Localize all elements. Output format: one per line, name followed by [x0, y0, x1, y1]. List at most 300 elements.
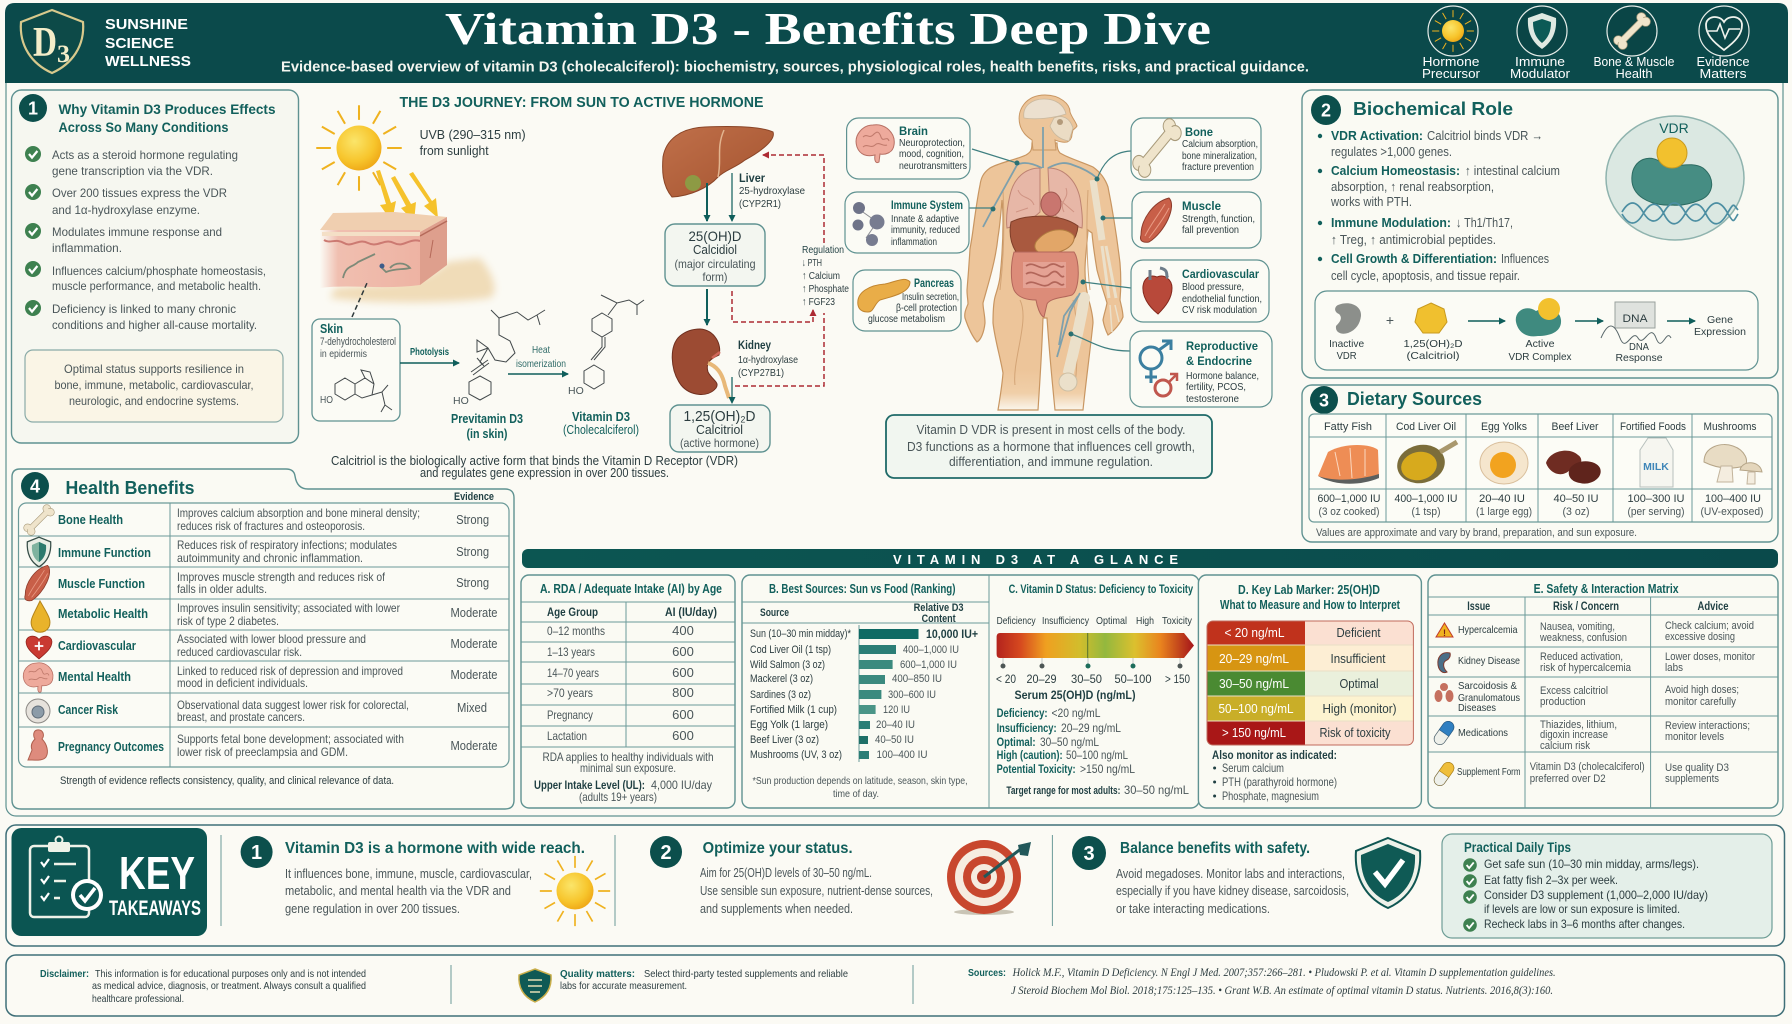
- RDA table: >70 years: [547, 686, 593, 700]
- practical daily tips: Get safe sun (10–30 min midday, arms/legs).: [1484, 857, 1699, 871]
- vitamin D3 molecule: (Cholecalciferol): [563, 422, 639, 437]
- RDA table: [521, 602, 735, 747]
- calcidiol box: Calcidiol: [693, 242, 737, 257]
- status range labels: [997, 615, 1193, 627]
- source bar chart: 120 IU: [883, 704, 910, 716]
- callout: VDR is present in most cells: Vitamin D VDR is present in most cells of the body.: [916, 422, 1186, 437]
- human body anatomy figure: [965, 95, 1123, 410]
- status definitions: High (caution):: [997, 748, 1063, 762]
- panel E: safety and interaction matrix: [1428, 575, 1778, 808]
- evidence ratings: [450, 512, 498, 753]
- callout: pancreas: β-cell protection: [896, 302, 957, 314]
- status range labels: Toxicity: [1162, 615, 1193, 627]
- column headers: Risk / Concern: [1553, 599, 1619, 613]
- benefit descriptions: risk of type 2 diabetes.: [177, 614, 279, 628]
- panel 4: health benefits: [12, 469, 514, 809]
- organ leader lines: [969, 149, 1132, 351]
- dietary note: Values are approximate and vary by brand, preparation, and sun exposure.: [1316, 527, 1637, 539]
- RDA table: AI (IU/day): [665, 605, 717, 619]
- column headers: Issue: [1467, 599, 1490, 613]
- callout: muscle: fall prevention: [1182, 224, 1239, 236]
- panel D title: What to Measure and How to Interpret: [1220, 598, 1401, 612]
- arrow: calcidiol to kidney: [706, 289, 708, 325]
- panel C: vitamin D status: [996, 582, 1194, 797]
- status range labels: High: [1136, 615, 1154, 627]
- panel B title: B. Best Sources: Sun vs Food (Ranking): [769, 582, 956, 596]
- heading: Biochemical Role: [1353, 99, 1513, 119]
- regulation feedback arrows: [732, 155, 824, 386]
- role bullet list: [1318, 128, 1560, 283]
- callout: bone: Bone: [1185, 125, 1213, 139]
- food source table: (3 oz): [1562, 506, 1590, 518]
- arrow: heat isomerization: [508, 344, 568, 374]
- icon: immune modulator: [1517, 6, 1567, 56]
- lab interpretation table: > 150 ng/mL: [1222, 725, 1286, 740]
- risk column: production: [1540, 696, 1586, 708]
- heading: Across So Many Conditions: [58, 119, 229, 135]
- heading: [58, 101, 276, 135]
- UVB label: from sunlight: [420, 143, 489, 158]
- skin box with 7-dehydrocholesterol: [312, 319, 400, 421]
- D3 journey title: THE D3 JOURNEY: FROM SUN TO ACTIVE HORMONE: [400, 95, 764, 111]
- icon: target: [947, 840, 1031, 915]
- status definitions: 20–29 ng/mL: [1061, 721, 1121, 735]
- source bar chart: 600–1,000 IU: [900, 659, 957, 671]
- callout: cardiovascular: endothelial function,: [1182, 293, 1262, 305]
- arrow: photolysis: Photolysis: [410, 346, 449, 358]
- RDA notes: (adults 19+ years): [579, 790, 657, 804]
- takeaway 3: Balance benefits with safety.: [1120, 840, 1310, 857]
- callout: immune system: inflammation: [891, 236, 937, 248]
- benefit check list: and 1α-hydroxylase enzyme.: [52, 203, 200, 217]
- benefit names: Muscle Function: [58, 576, 145, 591]
- status gradient arrow: [997, 633, 1194, 668]
- RDA table: 600: [672, 707, 694, 722]
- food source table: Beef Liver: [1552, 421, 1599, 433]
- previtamin D3 molecule: [451, 310, 545, 441]
- advice column: excessive dosing: [1665, 631, 1735, 643]
- RDA table: 0–12 months: [547, 624, 605, 638]
- food source table: 40–50 IU: [1554, 493, 1599, 505]
- issue names: [1457, 624, 1521, 778]
- takeaway 3: [1072, 836, 1420, 916]
- heart: [1041, 192, 1061, 216]
- icon: liver: [663, 127, 773, 197]
- icon: fortified milk: MILK: [1643, 461, 1669, 473]
- source bar chart: Sardines (3 oz): [750, 689, 811, 701]
- takeaway 3: especially if you have kidney disease, sarcoidosis,: [1116, 884, 1349, 898]
- takeaway 3: Avoid megadoses. Monitor labs and interactions,: [1116, 867, 1345, 881]
- title: Vitamin D3 - Benefits Deep Dive: [445, 3, 1211, 54]
- serum axis label: Serum 25(OH)D (ng/mL): [1014, 688, 1136, 702]
- callout: bone: bone mineralization,: [1182, 150, 1257, 162]
- skin box with 7-dehydrocholesterol: in epidermis: [320, 348, 367, 360]
- role bullet list: Cell Growth & Differentiation:: [1331, 251, 1497, 266]
- takeaway 2: Optimize your status.: [703, 840, 853, 857]
- heading: Why Vitamin D3 Produces Effects: [58, 101, 276, 117]
- benefit check list: [25, 146, 266, 332]
- RDA notes: minimal sun exposure.: [580, 761, 676, 775]
- kidney pathway: [732, 338, 798, 403]
- icon captions: Matters: [1700, 67, 1746, 81]
- advice column: monitor levels: [1665, 731, 1724, 743]
- icon: quality shield: [519, 969, 551, 1002]
- callout: muscle: Strength, function,: [1182, 213, 1255, 225]
- benefit names: Cancer Risk: [58, 702, 119, 717]
- intestines: [1011, 252, 1078, 317]
- callout: cardiovascular: CV risk modulation: [1182, 304, 1257, 316]
- callout: reproductive and endocrine: Reproductive: [1186, 339, 1258, 353]
- advice column: Lower doses, monitor: [1665, 651, 1755, 663]
- RDA table: 600: [672, 665, 694, 680]
- icon: hormone precursor: [1428, 6, 1478, 56]
- icon: fortified milk: [1640, 438, 1673, 487]
- sun production note: time of day.: [833, 788, 879, 800]
- status definitions: Deficiency:: [997, 706, 1048, 720]
- status range labels: Optimal: [1096, 615, 1127, 627]
- source bar chart: 20–40 IU: [876, 719, 915, 731]
- benefit check list: gene transcription via the VDR.: [52, 164, 213, 178]
- risk column: digoxin increase: [1540, 729, 1608, 741]
- VDR activation pathway: DNA: [1629, 341, 1649, 353]
- benefit check list: Modulates immune response and: [52, 225, 222, 239]
- icon: DNA response: [1615, 302, 1655, 328]
- RDA table: 1–13 years: [547, 645, 595, 659]
- takeaway 1: metabolic, and mental health via the VDR and: [285, 884, 511, 898]
- evidence ratings: Strong: [456, 512, 489, 527]
- vitamin D3 molecule: [563, 295, 644, 437]
- icon: skin cross-section: [320, 212, 495, 317]
- calcitriol box: (active hormone): [680, 436, 759, 450]
- lab interpretation table: Insufficient: [1330, 651, 1386, 666]
- journey caption: and regulates gene expression in over 200 tissues.: [420, 466, 669, 480]
- benefit names: Immune Function: [58, 545, 151, 560]
- status range labels: Insufficiency: [1042, 615, 1090, 627]
- sun production note: *Sun production depends on latitude, season, skin type,: [752, 775, 968, 787]
- vitamin D3 molecule: Vitamin D3: [572, 409, 630, 424]
- practical daily tips: Consider D3 supplement (1,000–2,000 IU/day): [1484, 888, 1708, 902]
- previtamin D3 molecule: HO: [453, 395, 469, 407]
- source bar chart: Beef Liver (3 oz): [750, 734, 819, 746]
- role bullet list: absorption, ↑ renal reabsorption,: [1331, 179, 1494, 194]
- icon: mushrooms: [1704, 445, 1762, 484]
- takeaway 2: Aim for 25(OH)D levels of 30–50 ng/mL.: [700, 866, 872, 880]
- callout: pancreas: Pancreas: [914, 276, 954, 290]
- evidence column label: Evidence: [454, 491, 494, 503]
- calcidiol box: 25(OH)D: [688, 228, 742, 244]
- heading: Dietary Sources: [1347, 389, 1482, 409]
- benefit check list: Over 200 tissues express the VDR: [52, 186, 227, 200]
- optimal status callout: neurologic, and endocrine systems.: [69, 394, 239, 408]
- role bullet list: Calcium Homeostasis:: [1331, 163, 1460, 178]
- callout: reproductive and endocrine: [1130, 331, 1272, 407]
- disclaimer: Disclaimer:: [40, 968, 89, 980]
- icon captions: Immune: [1515, 55, 1565, 69]
- role bullet list: ↑ Treg, ↑ antimicrobial peptides.: [1331, 232, 1496, 247]
- right leg bone: [1059, 292, 1090, 391]
- callout: VDR is present in most cells: differentiation, and immune regulation.: [949, 454, 1153, 469]
- RDA table: 600: [672, 644, 694, 659]
- lungs: [1007, 168, 1082, 228]
- regulation list: [802, 244, 849, 308]
- benefit descriptions: Improves muscle strength and reduces risk of: [177, 570, 386, 584]
- icon: beef liver: [1546, 451, 1601, 484]
- practical daily tips: [1442, 834, 1772, 938]
- RDA table: 600: [672, 728, 694, 743]
- benefit names: Pregnancy Outcomes: [58, 739, 164, 754]
- RDA notes: Upper Intake Level (UL):: [534, 778, 645, 792]
- risk column: Reduced activation,: [1540, 651, 1623, 663]
- icon captions: Health: [1616, 67, 1653, 81]
- status definitions: [997, 706, 1189, 797]
- VDR receptor illustration: [1606, 116, 1744, 240]
- food source table: 400–1,000 IU: [1394, 493, 1458, 505]
- VDR activation pathway: +: [1386, 312, 1394, 328]
- takeaway 3: 3: [1083, 843, 1095, 865]
- icon captions: Precursor: [1422, 67, 1480, 81]
- RDA table: Age Group: [547, 605, 598, 619]
- RDA table: 800: [672, 685, 694, 700]
- benefit descriptions: breast, and prostate cancers.: [177, 710, 305, 724]
- advice column: Review interactions;: [1665, 720, 1750, 732]
- badge 1: 1: [28, 98, 38, 118]
- issue icons: [1432, 623, 1456, 788]
- callout: cardiovascular: Cardiovascular: [1182, 267, 1259, 281]
- benefit descriptions: reduces risk of fractures and osteoporosis.: [177, 519, 365, 533]
- panel E title: E. Safety & Interaction Matrix: [1534, 582, 1679, 596]
- callout: brain: mood, cognition,: [899, 148, 964, 160]
- takeaway 3: or take interacting medications.: [1116, 902, 1270, 916]
- source bar chart: 40–50 IU: [875, 734, 914, 746]
- RDA table: 14–70 years: [547, 666, 599, 680]
- icon: salmon: [1318, 445, 1379, 484]
- VDR activation pathway: [1315, 291, 1758, 370]
- benefit descriptions: falls in older adults.: [177, 582, 267, 596]
- source bar chart: Sun (10–30 min midday)*: [750, 628, 852, 640]
- food source table: Cod Liver Oil: [1396, 421, 1456, 433]
- takeaway 2: 2: [660, 842, 672, 864]
- callout: reproductive and endocrine: & Endocrine: [1186, 354, 1252, 368]
- quality matters: labs for accurate measurement.: [560, 980, 687, 992]
- risk column: Vitamin D3 (cholecalciferol): [1530, 761, 1645, 773]
- practical daily tips: Recheck labs in 3–6 months after changes.: [1484, 917, 1685, 931]
- lab interpretation table: 30–50 ng/mL: [1219, 676, 1289, 691]
- row icons: [23, 505, 54, 760]
- brand name: [105, 16, 191, 70]
- column headers: [1467, 599, 1729, 613]
- arrow: heat isomerization: Heat: [532, 344, 550, 356]
- badge 3: [1310, 386, 1338, 414]
- issue icons: !: [1443, 628, 1446, 638]
- also monitor list: Phosphate, magnesium: [1222, 789, 1319, 803]
- callout: cardiovascular: [1131, 260, 1269, 322]
- status range labels: Deficiency: [997, 615, 1036, 627]
- benefit names: Metabolic Health: [58, 606, 148, 621]
- source bar chart: 100–400 IU: [876, 749, 928, 761]
- risk column: Thiazides, lithium,: [1540, 719, 1617, 731]
- icon: cod liver oil spoon: [1394, 440, 1457, 488]
- regulation list: Regulation: [802, 244, 844, 256]
- disclaimer: This information is for educational purposes only and is not intended: [95, 968, 366, 980]
- benefit descriptions: Linked to reduced risk of depression and improved: [177, 664, 403, 678]
- takeaway 2: and supplements when needed.: [700, 902, 853, 916]
- benefit check list: muscle performance, and metabolic health.: [52, 279, 261, 293]
- source bar chart: Mackerel (3 oz): [750, 673, 813, 685]
- takeaway 1: gene regulation in over 200 tissues.: [285, 902, 460, 916]
- vitamin D3 molecule: HO: [568, 385, 584, 397]
- callout: reproductive and endocrine: testosterone: [1186, 393, 1239, 405]
- benefit check list: Acts as a steroid hormone regulating: [52, 148, 238, 162]
- VDR activation pathway: Inactive: [1329, 338, 1364, 350]
- role bullet list: Influences: [1501, 251, 1549, 266]
- lab interpretation table: [1207, 621, 1413, 745]
- kidney pathway: Kidney: [738, 338, 771, 352]
- callout: pancreas: [853, 270, 961, 331]
- skin box with 7-dehydrocholesterol: HO: [320, 394, 333, 406]
- VDR activation pathway: DNA: [1622, 313, 1648, 325]
- advice column: Check calcium; avoid: [1665, 620, 1754, 632]
- liver and stomach: [1010, 216, 1078, 254]
- food source table: Fatty Fish: [1324, 421, 1372, 433]
- optimal status callout: bone, immune, metabolic, cardiovascular,: [54, 378, 254, 392]
- food source table: Fortified Foods: [1620, 421, 1686, 433]
- also monitor list: [1212, 748, 1337, 803]
- evidence ratings: Strong: [456, 575, 489, 590]
- callout: bone: [1131, 118, 1261, 180]
- food source table: 20–40 IU: [1479, 493, 1525, 505]
- lab interpretation table: < 20 ng/mL: [1224, 625, 1284, 640]
- risk column: Nausea, vomiting,: [1540, 621, 1615, 633]
- benefit descriptions: autoimmunity and chronic inflammation.: [177, 551, 363, 565]
- optimal status callout: Optimal status supports resilience in: [64, 362, 244, 376]
- calcitriol box: [670, 405, 770, 452]
- icon: sun: [540, 856, 610, 926]
- issue names: Hypercalcemia: [1458, 624, 1518, 636]
- previtamin D3 molecule: (in skin): [466, 426, 508, 441]
- VDR activation pathway: VDR: [1337, 350, 1357, 362]
- kidney pathway: 1α-hydroxylase: [738, 354, 798, 366]
- column headers: Relative D3: [914, 602, 964, 614]
- issue names: Kidney Disease: [1458, 655, 1520, 667]
- callout: muscle: [1132, 192, 1261, 248]
- benefit descriptions: [177, 506, 420, 759]
- disclaimer: as medical advice, diagnosis, or treatment. Always consult a qualified: [92, 980, 366, 992]
- food source table: (1 tsp): [1412, 506, 1440, 518]
- also monitor list: PTH (parathyroid hormone): [1222, 775, 1337, 789]
- calcitriol box: Calcitriol: [696, 422, 743, 437]
- icon: active VDR complex: [1516, 308, 1561, 336]
- head and skull: [1019, 95, 1077, 150]
- benefit descriptions: Improves calcium absorption and bone mineral density;: [177, 506, 420, 520]
- source bar chart: Cod Liver Oil (1 tsp): [750, 644, 831, 656]
- quality matters: [560, 968, 848, 992]
- benefit descriptions: lower risk of preeclampsia and GDM.: [177, 745, 348, 759]
- column headers: Source: [760, 607, 789, 619]
- status range values: 20–29: [1026, 672, 1057, 686]
- callout: muscle: Muscle: [1182, 199, 1221, 213]
- UVB label: UVB (290–315 nm): [420, 127, 526, 142]
- regulation list: ↓ PTH: [802, 257, 822, 269]
- header banner: [5, 3, 1788, 83]
- source bar chart: Mushrooms (UV, 3 oz): [750, 749, 842, 761]
- panel A title: A. RDA / Adequate Intake (AI) by Age: [540, 582, 722, 596]
- practical daily tips: Eat fatty fish 2–3x per week.: [1484, 873, 1618, 887]
- callout: pancreas: glucose metabolism: [868, 313, 945, 325]
- key takeaways badge: KEY: [119, 847, 195, 899]
- risk column: preferred over D2: [1530, 773, 1606, 785]
- liver pathway: Liver: [739, 171, 765, 185]
- food source table: Mushrooms: [1704, 421, 1757, 433]
- liver pathway: (CYP2R1): [739, 198, 781, 210]
- takeaway 1: It influences bone, immune, muscle, cardiovascular,: [285, 867, 532, 881]
- benefit descriptions: mood in deficient individuals.: [177, 676, 308, 690]
- callout: brain: Neuroprotection,: [899, 137, 965, 149]
- key takeaways panel: [6, 825, 1784, 946]
- logo: D3 shield: 3: [57, 41, 70, 68]
- callout: VDR is present in most cells: [886, 415, 1212, 478]
- callout: immune system: Immune System: [891, 198, 963, 212]
- benefit names: Cardiovascular: [58, 638, 136, 653]
- source bar chart: Wild Salmon (3 oz): [750, 659, 825, 671]
- callout: cardiovascular: Blood pressure,: [1182, 281, 1244, 293]
- icon: sun with UVB rays: [316, 105, 438, 222]
- benefit descriptions: Improves insulin sensitivity; associated with lower: [177, 601, 400, 615]
- arrow: photolysis: [400, 346, 459, 363]
- key takeaways badge: TAKEAWAYS: [109, 897, 201, 920]
- panel C title: C. Vitamin D Status: Deficiency to Toxicity: [1009, 582, 1193, 596]
- also monitor list: Serum calcium: [1222, 761, 1284, 775]
- kidney pathway: (CYP27B1): [738, 367, 784, 379]
- RDA notes: RDA applies to healthy individuals with: [542, 750, 714, 764]
- lab interpretation table: Deficient: [1336, 625, 1381, 640]
- benefit descriptions: Observational data suggest lower risk for colorectal,: [177, 698, 409, 712]
- previtamin D3 molecule: Previtamin D3: [451, 411, 523, 426]
- benefit names: Bone Health: [58, 512, 123, 527]
- calcidiol box: form): [702, 270, 728, 284]
- callout: brain: neurotransmitters: [899, 160, 967, 172]
- callout: reproductive and endocrine: fertility, PCOS,: [1186, 381, 1246, 393]
- food source table: 100–300 IU: [1628, 493, 1685, 505]
- advice column: monitor carefully: [1665, 696, 1736, 708]
- panel A: RDA by age: [521, 575, 735, 808]
- sources: Sources:: [968, 967, 1006, 979]
- RDA notes: [534, 750, 714, 804]
- takeaway 2: Use sensible sun exposure, nutrient-dense sources,: [700, 884, 933, 898]
- practical daily tips: if levels are low or sun exposure is limited.: [1484, 902, 1680, 916]
- skin box with 7-dehydrocholesterol: Skin: [320, 321, 343, 336]
- status range values: < 20: [996, 672, 1016, 686]
- role bullet list: Immune Modulation:: [1331, 215, 1451, 230]
- status definitions: <20 ng/mL: [1052, 706, 1101, 720]
- source bar chart: 400–850 IU: [892, 673, 942, 685]
- VDR activation pathway: (Calcitriol): [1406, 350, 1460, 362]
- source bar chart: 400–1,000 IU: [903, 644, 959, 656]
- lab interpretation table: High (monitor): [1322, 701, 1396, 716]
- journey caption: [331, 454, 738, 480]
- callout: bone: fracture prevention: [1182, 161, 1254, 173]
- arrow: heat isomerization: isomerization: [516, 358, 566, 370]
- food source table: Egg Yolks: [1481, 421, 1527, 433]
- benefit descriptions: reduced cardiovascular risk.: [177, 645, 302, 659]
- icon: inactive VDR: [1335, 303, 1361, 334]
- role bullet list: regulates >1,000 genes.: [1331, 144, 1452, 159]
- source bar chart: 300–600 IU: [888, 689, 936, 701]
- icon: bone and muscle: [1607, 6, 1657, 56]
- panel 2: biochemical role: [1302, 90, 1778, 378]
- skin box with 7-dehydrocholesterol: 7-dehydrocholesterol: [320, 336, 396, 348]
- badge 3: 3: [1319, 390, 1329, 410]
- badge 1: [19, 94, 47, 122]
